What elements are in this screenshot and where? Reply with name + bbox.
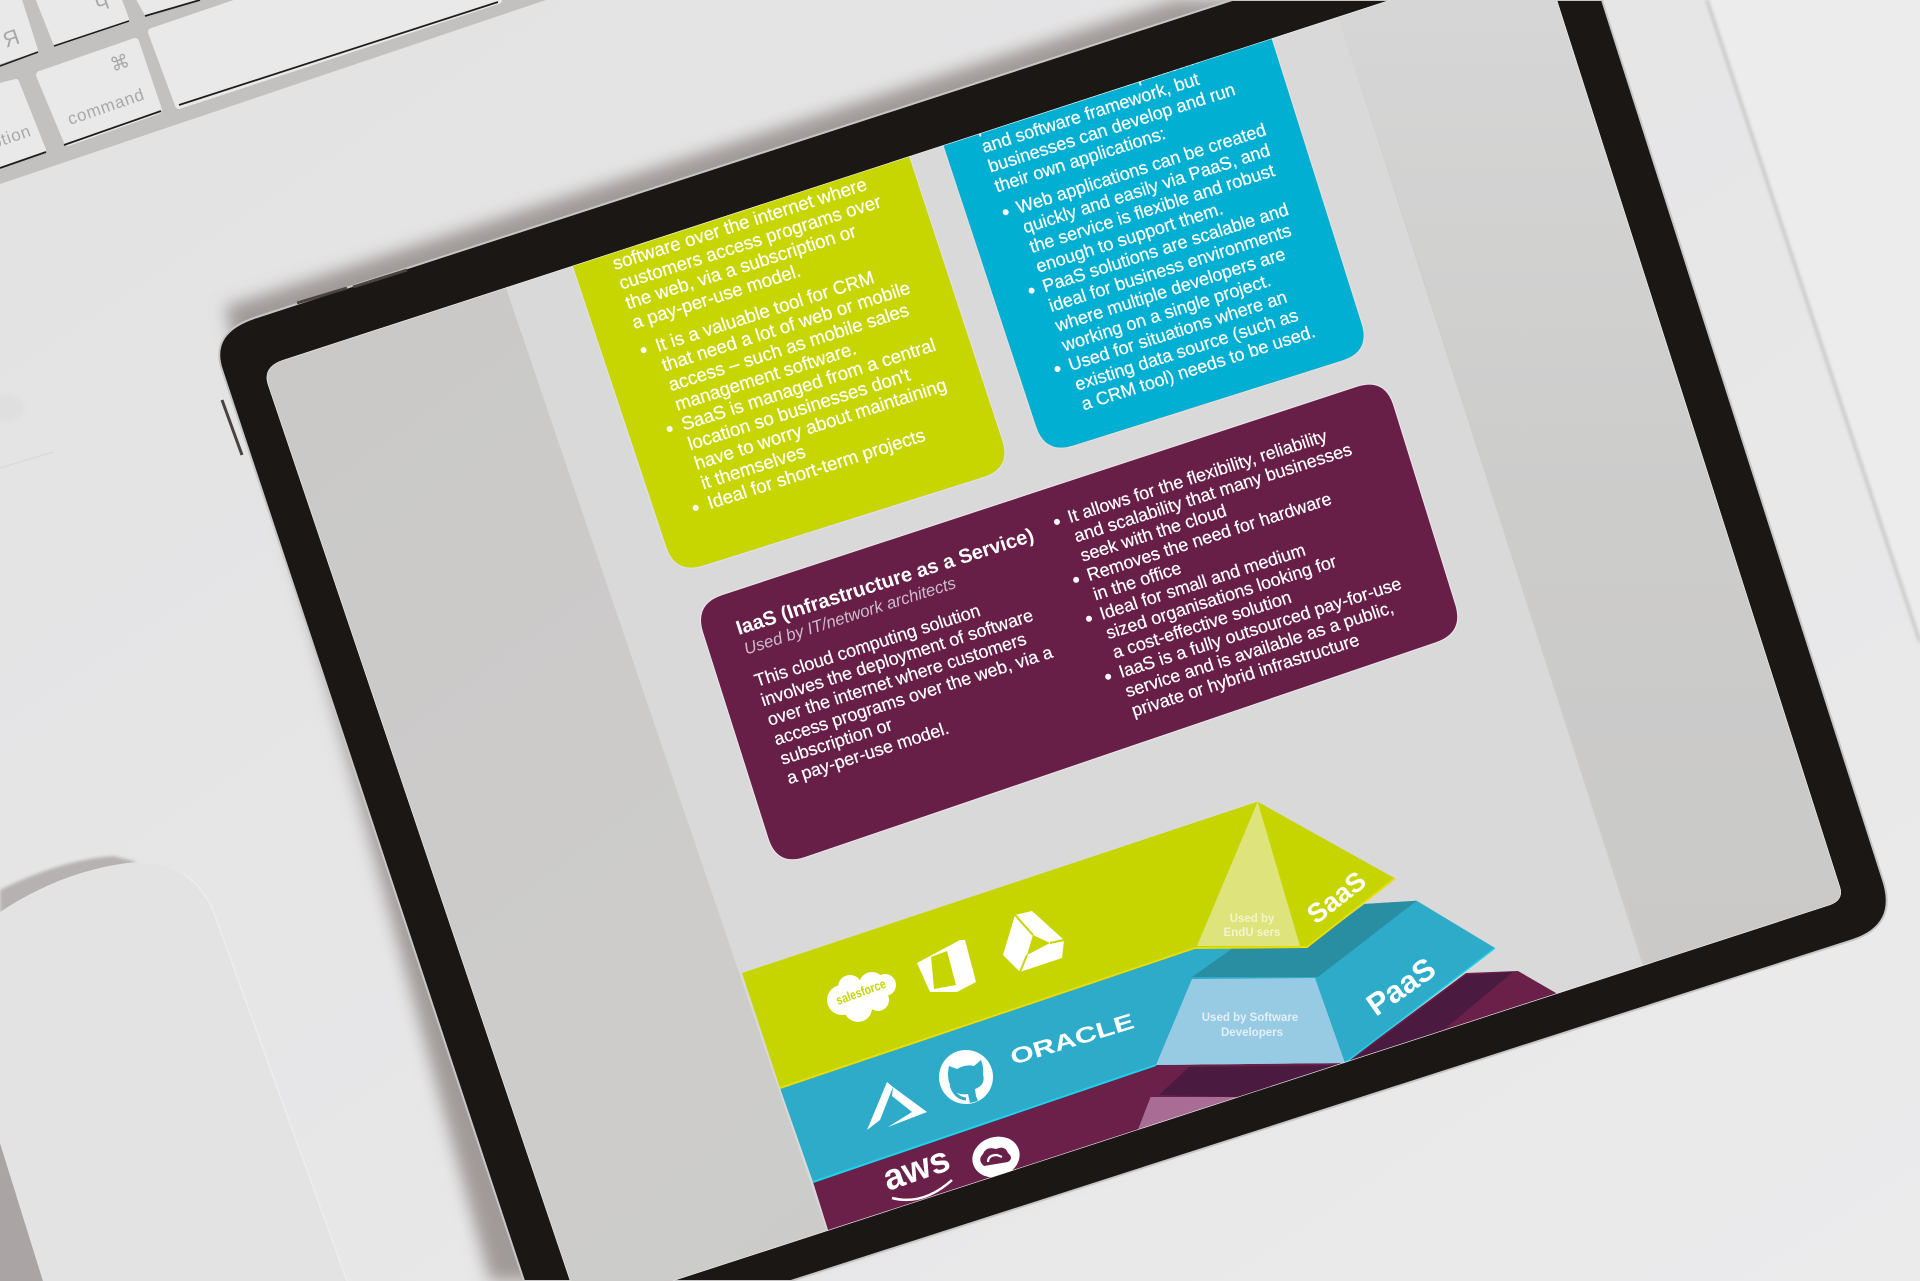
paper sheet edge bbox=[1707, 0, 1920, 642]
IaaS bullet list bbox=[1054, 432, 1402, 720]
key: command bbox=[40, 42, 161, 145]
logo: aws: aws bbox=[877, 1138, 955, 1199]
IaaS bullet list: in the office bbox=[1091, 558, 1184, 604]
SaaS text block: have to worry about maintaining bbox=[692, 374, 949, 474]
PaaS text block: working on a single project. bbox=[1058, 270, 1273, 355]
SaaS text block: access – such as mobile sales bbox=[666, 299, 911, 395]
logo: Azure bbox=[867, 1082, 927, 1130]
IaaS heading and description: involves the deployment of software bbox=[758, 605, 1036, 710]
key: command: command bbox=[65, 85, 147, 129]
pyramid face: end users: EndU sers bbox=[1224, 927, 1280, 939]
panel: PaaS bbox=[942, 38, 1364, 448]
pyramid tier: SaaS bbox=[742, 802, 1395, 1088]
IaaS bullet list: seek with the cloud bbox=[1078, 500, 1229, 566]
logo: Salesforce bbox=[827, 972, 896, 1022]
SaaS text block: that need a lot of web or mobile bbox=[659, 277, 913, 375]
pyramid face: software developers bbox=[1156, 978, 1345, 1065]
earbud case bbox=[0, 395, 53, 468]
PaaS text block bbox=[978, 62, 1315, 410]
SaaS text block: It is a valuable tool for CRM bbox=[653, 267, 877, 356]
pyramid tier: IaaS bbox=[813, 971, 1556, 1230]
key: R bbox=[0, 0, 38, 66]
PaaS text block: provides a hardware platform bbox=[972, 48, 1201, 137]
label: SaaS: SaaS bbox=[1301, 865, 1372, 930]
PaaS text block: a CRM tool) needs to be used. bbox=[1079, 321, 1318, 414]
pyramid face: software developers: Developers bbox=[1221, 1027, 1283, 1039]
panel: SaaS bbox=[567, 130, 1005, 568]
SaaS text block: software over the internet where bbox=[610, 173, 869, 274]
logo: Salesforce: salesforce bbox=[834, 976, 888, 1008]
IaaS bullet list: private or hybrid infrastructure bbox=[1129, 630, 1362, 721]
logo: GitHub bbox=[939, 1050, 993, 1104]
infographic page bbox=[506, 16, 1643, 1231]
IaaS heading and description: This cloud computing solution bbox=[752, 600, 983, 691]
IaaS bullet list: Ideal for small and medium bbox=[1097, 540, 1308, 624]
PaaS text block: ideal for business environments bbox=[1046, 220, 1294, 316]
SaaS text block: the web, via a subscription or bbox=[623, 220, 859, 313]
pyramid face: end users bbox=[1197, 802, 1300, 946]
label: PaaS: PaaS bbox=[1360, 951, 1442, 1023]
IaaS heading and description: a pay-per-use model. bbox=[784, 718, 951, 788]
SaaS text block: Ideal for short-term projects bbox=[705, 424, 928, 513]
pyramid face: IaaS bbox=[1138, 1097, 1237, 1130]
SaaS text block: management software. bbox=[672, 337, 859, 415]
key: spacebar bbox=[152, 0, 498, 105]
SaaS text block: location so businesses don't bbox=[685, 364, 913, 454]
IaaS heading and description bbox=[736, 528, 1054, 784]
PaaS text block: where multiple developers are bbox=[1052, 244, 1288, 336]
PaaS text block: Web applications can be created bbox=[1014, 120, 1269, 218]
PaaS text block: quickly and easily via PaaS, and bbox=[1020, 140, 1273, 237]
PaaS text block: Used for situations where an bbox=[1066, 287, 1289, 375]
logo: Office bbox=[917, 940, 976, 992]
IaaS heading and description: Used by IT/network architects bbox=[742, 573, 959, 658]
keyboard bbox=[0, 0, 546, 184]
IaaS bullet list: sized organisations looking for bbox=[1103, 551, 1339, 643]
PaaS text block: businesses can develop and run bbox=[985, 79, 1238, 176]
SaaS text block: SaaS is managed from a central bbox=[679, 334, 938, 434]
SaaS text block bbox=[613, 181, 948, 511]
PaaS text block: existing data source (such as bbox=[1072, 305, 1301, 395]
IaaS bullet list: a cost-effective solution bbox=[1110, 587, 1294, 662]
logo: aws bbox=[885, 1153, 953, 1202]
key: R: Я bbox=[0, 24, 23, 53]
PaaS text block: their own applications: bbox=[992, 123, 1168, 196]
pyramid face: end users: Used by bbox=[1230, 913, 1275, 925]
IaaS heading and description: subscription or bbox=[778, 714, 895, 769]
mouse bbox=[0, 856, 347, 1281]
IaaS bullet list: Removes the need for hardware bbox=[1084, 489, 1334, 585]
side buttons bbox=[222, 270, 407, 455]
key: next bbox=[138, 0, 198, 14]
IaaS bullet list: service and is available as a public, bbox=[1123, 597, 1396, 701]
key: P bbox=[38, 0, 129, 46]
IaaS heading and description: IaaS (Infrastructure as a Service) bbox=[733, 525, 1037, 640]
IaaS heading and description: access programs over the web, via a bbox=[771, 642, 1055, 749]
key: command: ⌘ bbox=[107, 50, 133, 77]
PaaS text block: PaaS solutions are scalable and bbox=[1040, 199, 1291, 296]
IaaS bullet list: and scalability that many businesses bbox=[1071, 439, 1354, 546]
logo: Drive bbox=[1003, 911, 1064, 972]
key: option bbox=[0, 82, 46, 168]
panel: IaaS bbox=[700, 384, 1458, 860]
SaaS text block: a pay-per-use model. bbox=[629, 260, 803, 333]
PaaS text block: and software framework, but bbox=[979, 69, 1202, 157]
SaaS text block: customers access programs over bbox=[616, 191, 884, 293]
pyramid face: software developers: Used by Software bbox=[1202, 1012, 1298, 1024]
IaaS bullet list: It allows for the flexibility, reliability bbox=[1065, 426, 1330, 527]
IaaS bullet list: IaaS is a fully outsourced pay-for-use bbox=[1116, 573, 1404, 682]
pyramid tier: PaaS bbox=[780, 901, 1495, 1182]
PaaS text block: enough to support them. bbox=[1033, 198, 1225, 277]
PaaS text block: the service is flexible and robust bbox=[1027, 160, 1277, 257]
IaaS heading and description: over the internet where customers bbox=[765, 629, 1029, 730]
logo: cloud circle bbox=[972, 1136, 1020, 1178]
SaaS text block: it themselves bbox=[698, 441, 808, 493]
logo: Oracle: ORACLE bbox=[1007, 1008, 1137, 1070]
